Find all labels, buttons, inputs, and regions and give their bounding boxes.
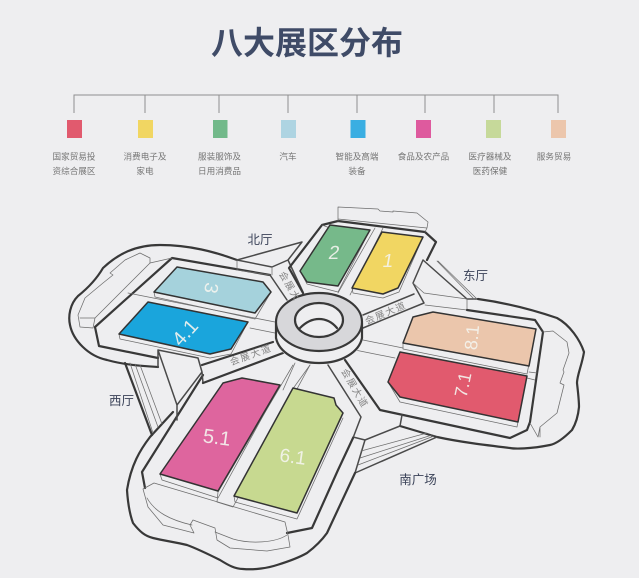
pavilion 5.1 <box>160 378 280 498</box>
pavilion 2: 2 <box>327 243 341 264</box>
title: 八大展区分布 <box>211 25 403 61</box>
pavilion 8.1 <box>403 312 536 374</box>
legend item: 服装服饰及日用消费品 <box>198 120 241 176</box>
road label: south: 会展大道 <box>338 366 371 411</box>
pavilion 7.1: 7.1 <box>451 370 476 399</box>
hall label: 东厅: 东厅 <box>463 269 488 283</box>
west stairs and connector <box>125 342 283 435</box>
pavilion 4.1: 4.1 <box>168 315 203 351</box>
hall label: 北厅: 北厅 <box>247 233 273 247</box>
road labels <box>228 269 408 411</box>
legend item: 服装服饰及日用消费品: 日用消费品 <box>198 165 241 176</box>
pavilion 4.1 <box>119 302 248 358</box>
north hall wing outline <box>69 242 303 367</box>
pavilion 6.1 <box>234 388 343 519</box>
legend item: 国家贸易投资综合展区 <box>53 120 96 176</box>
legend item: 智能及高端装备 <box>336 120 379 176</box>
east wing outline <box>345 299 584 449</box>
north-east wing outline <box>289 207 478 328</box>
floor plan <box>69 207 584 569</box>
pavilion 7.1 <box>388 352 527 427</box>
pavilion 8.1: 8.1 <box>461 324 483 351</box>
legend item: 消费电子及家电: 家电 <box>136 165 154 176</box>
legend item: 智能及高端装备: 智能及高端 <box>336 150 379 162</box>
legend item: 食品及农产品: 食品及农产品 <box>398 150 449 162</box>
pavilion 5.1: 5.1 <box>202 425 232 451</box>
road label: north: 会展大 <box>276 269 303 304</box>
legend item: 医疗器械及医药保健: 医疗器械及 <box>469 150 512 162</box>
legend item: 国家贸易投资综合展区: 资综合展区 <box>53 165 96 176</box>
pavilion 3: 3 <box>199 281 222 295</box>
legend <box>53 95 571 176</box>
central hub ring <box>276 293 362 390</box>
pavilion 6.1: 6.1 <box>278 445 307 470</box>
legend item: 服务贸易: 服务贸易 <box>537 150 571 162</box>
road label: east: 会展大道 <box>363 299 408 327</box>
legend item: 食品及农产品 <box>398 120 449 162</box>
pavilion 1 <box>352 232 423 298</box>
legend item: 汽车 <box>279 120 297 162</box>
legend item: 医疗器械及医药保健: 医药保健 <box>473 165 508 176</box>
legend connector tree <box>74 95 558 113</box>
hall label: 南广场: 南广场 <box>399 472 437 487</box>
legend item: 国家贸易投资综合展区: 国家贸易投 <box>53 150 96 162</box>
south stairs <box>328 365 437 473</box>
legend item: 医疗器械及医药保健 <box>469 120 512 176</box>
hall label: 西厅: 西厅 <box>109 394 134 408</box>
pavilion 2 <box>300 225 370 292</box>
legend item: 服务贸易 <box>537 120 571 162</box>
south-west wing outline <box>127 365 355 569</box>
legend item: 消费电子及家电 <box>124 120 167 176</box>
pavilion 1: 1 <box>381 251 395 272</box>
legend item: 服装服饰及日用消费品: 服装服饰及 <box>198 150 241 162</box>
legend item: 汽车: 汽车 <box>279 150 297 162</box>
legend item: 智能及高端装备: 装备 <box>348 165 366 176</box>
pavilion 3 <box>154 267 271 319</box>
road label: west: 会展大道 <box>228 342 274 368</box>
legend item: 消费电子及家电: 消费电子及 <box>124 150 167 162</box>
